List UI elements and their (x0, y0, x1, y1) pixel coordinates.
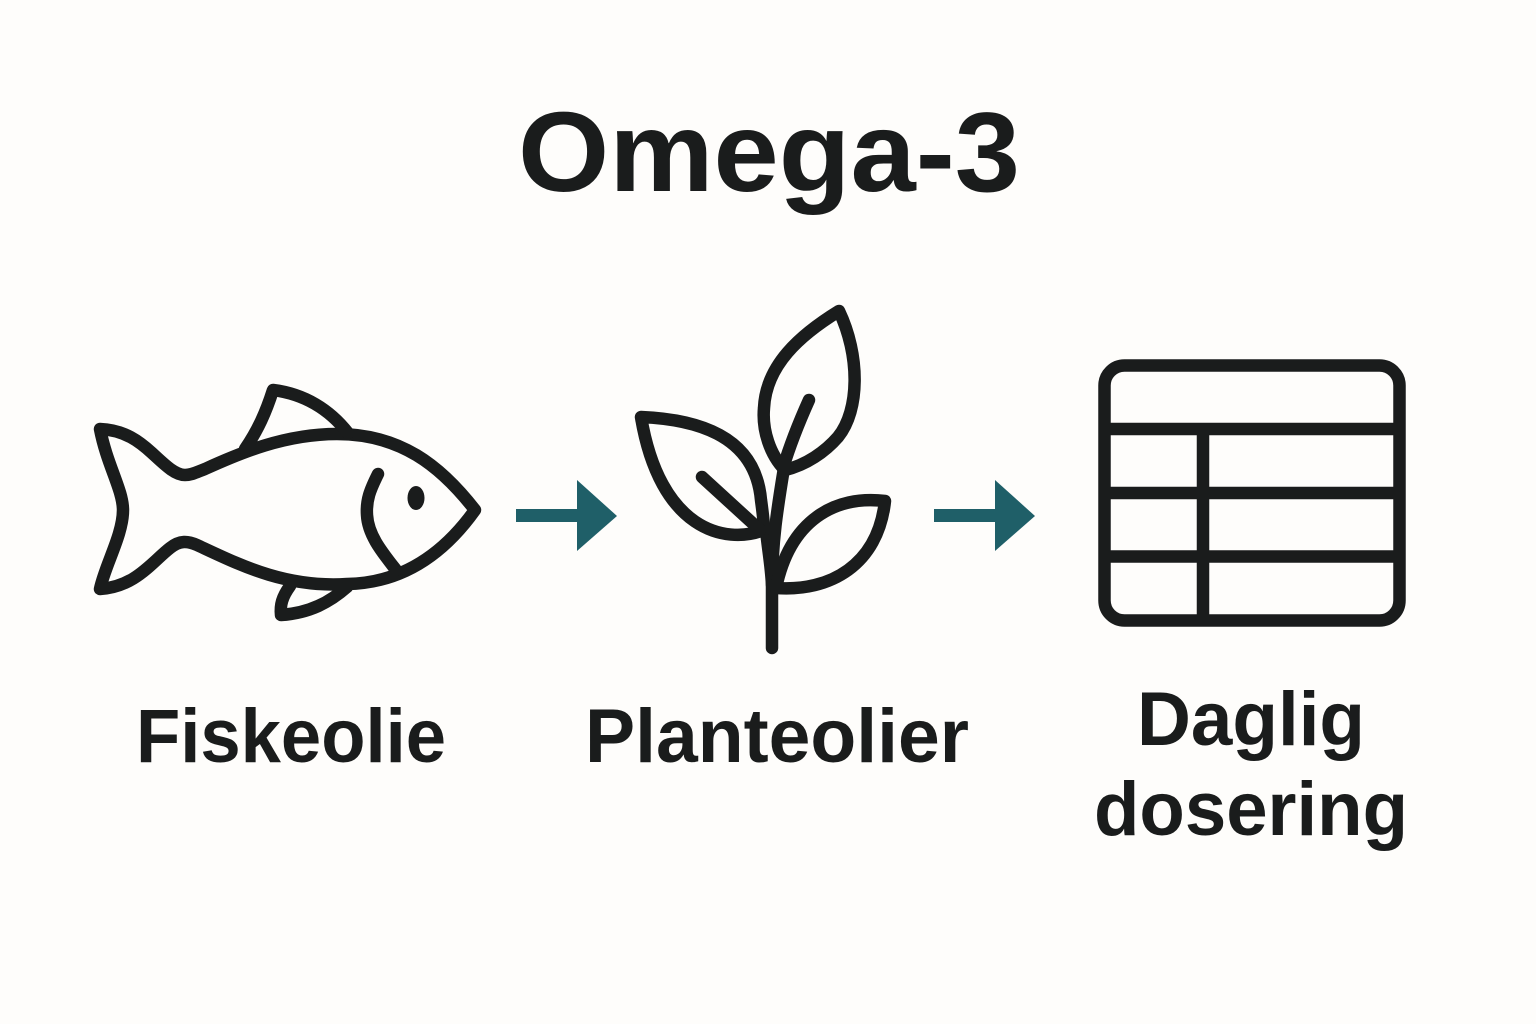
arrow: fish to plants (516, 480, 617, 551)
label: Fiskeolie: Fiskeolie (136, 694, 446, 779)
title: Omega-3 (518, 89, 1020, 215)
label: Planteolier: Planteolier (585, 694, 969, 779)
label: Daglig dosering: Daglig (1137, 677, 1365, 762)
icon: plant (641, 311, 885, 648)
label: Daglig dosering (1094, 677, 1408, 852)
label: Daglig dosering: dosering (1094, 767, 1408, 852)
icon: dosage table (1104, 366, 1400, 621)
icon: fish (100, 390, 475, 615)
arrow: plants to table (934, 480, 1035, 551)
